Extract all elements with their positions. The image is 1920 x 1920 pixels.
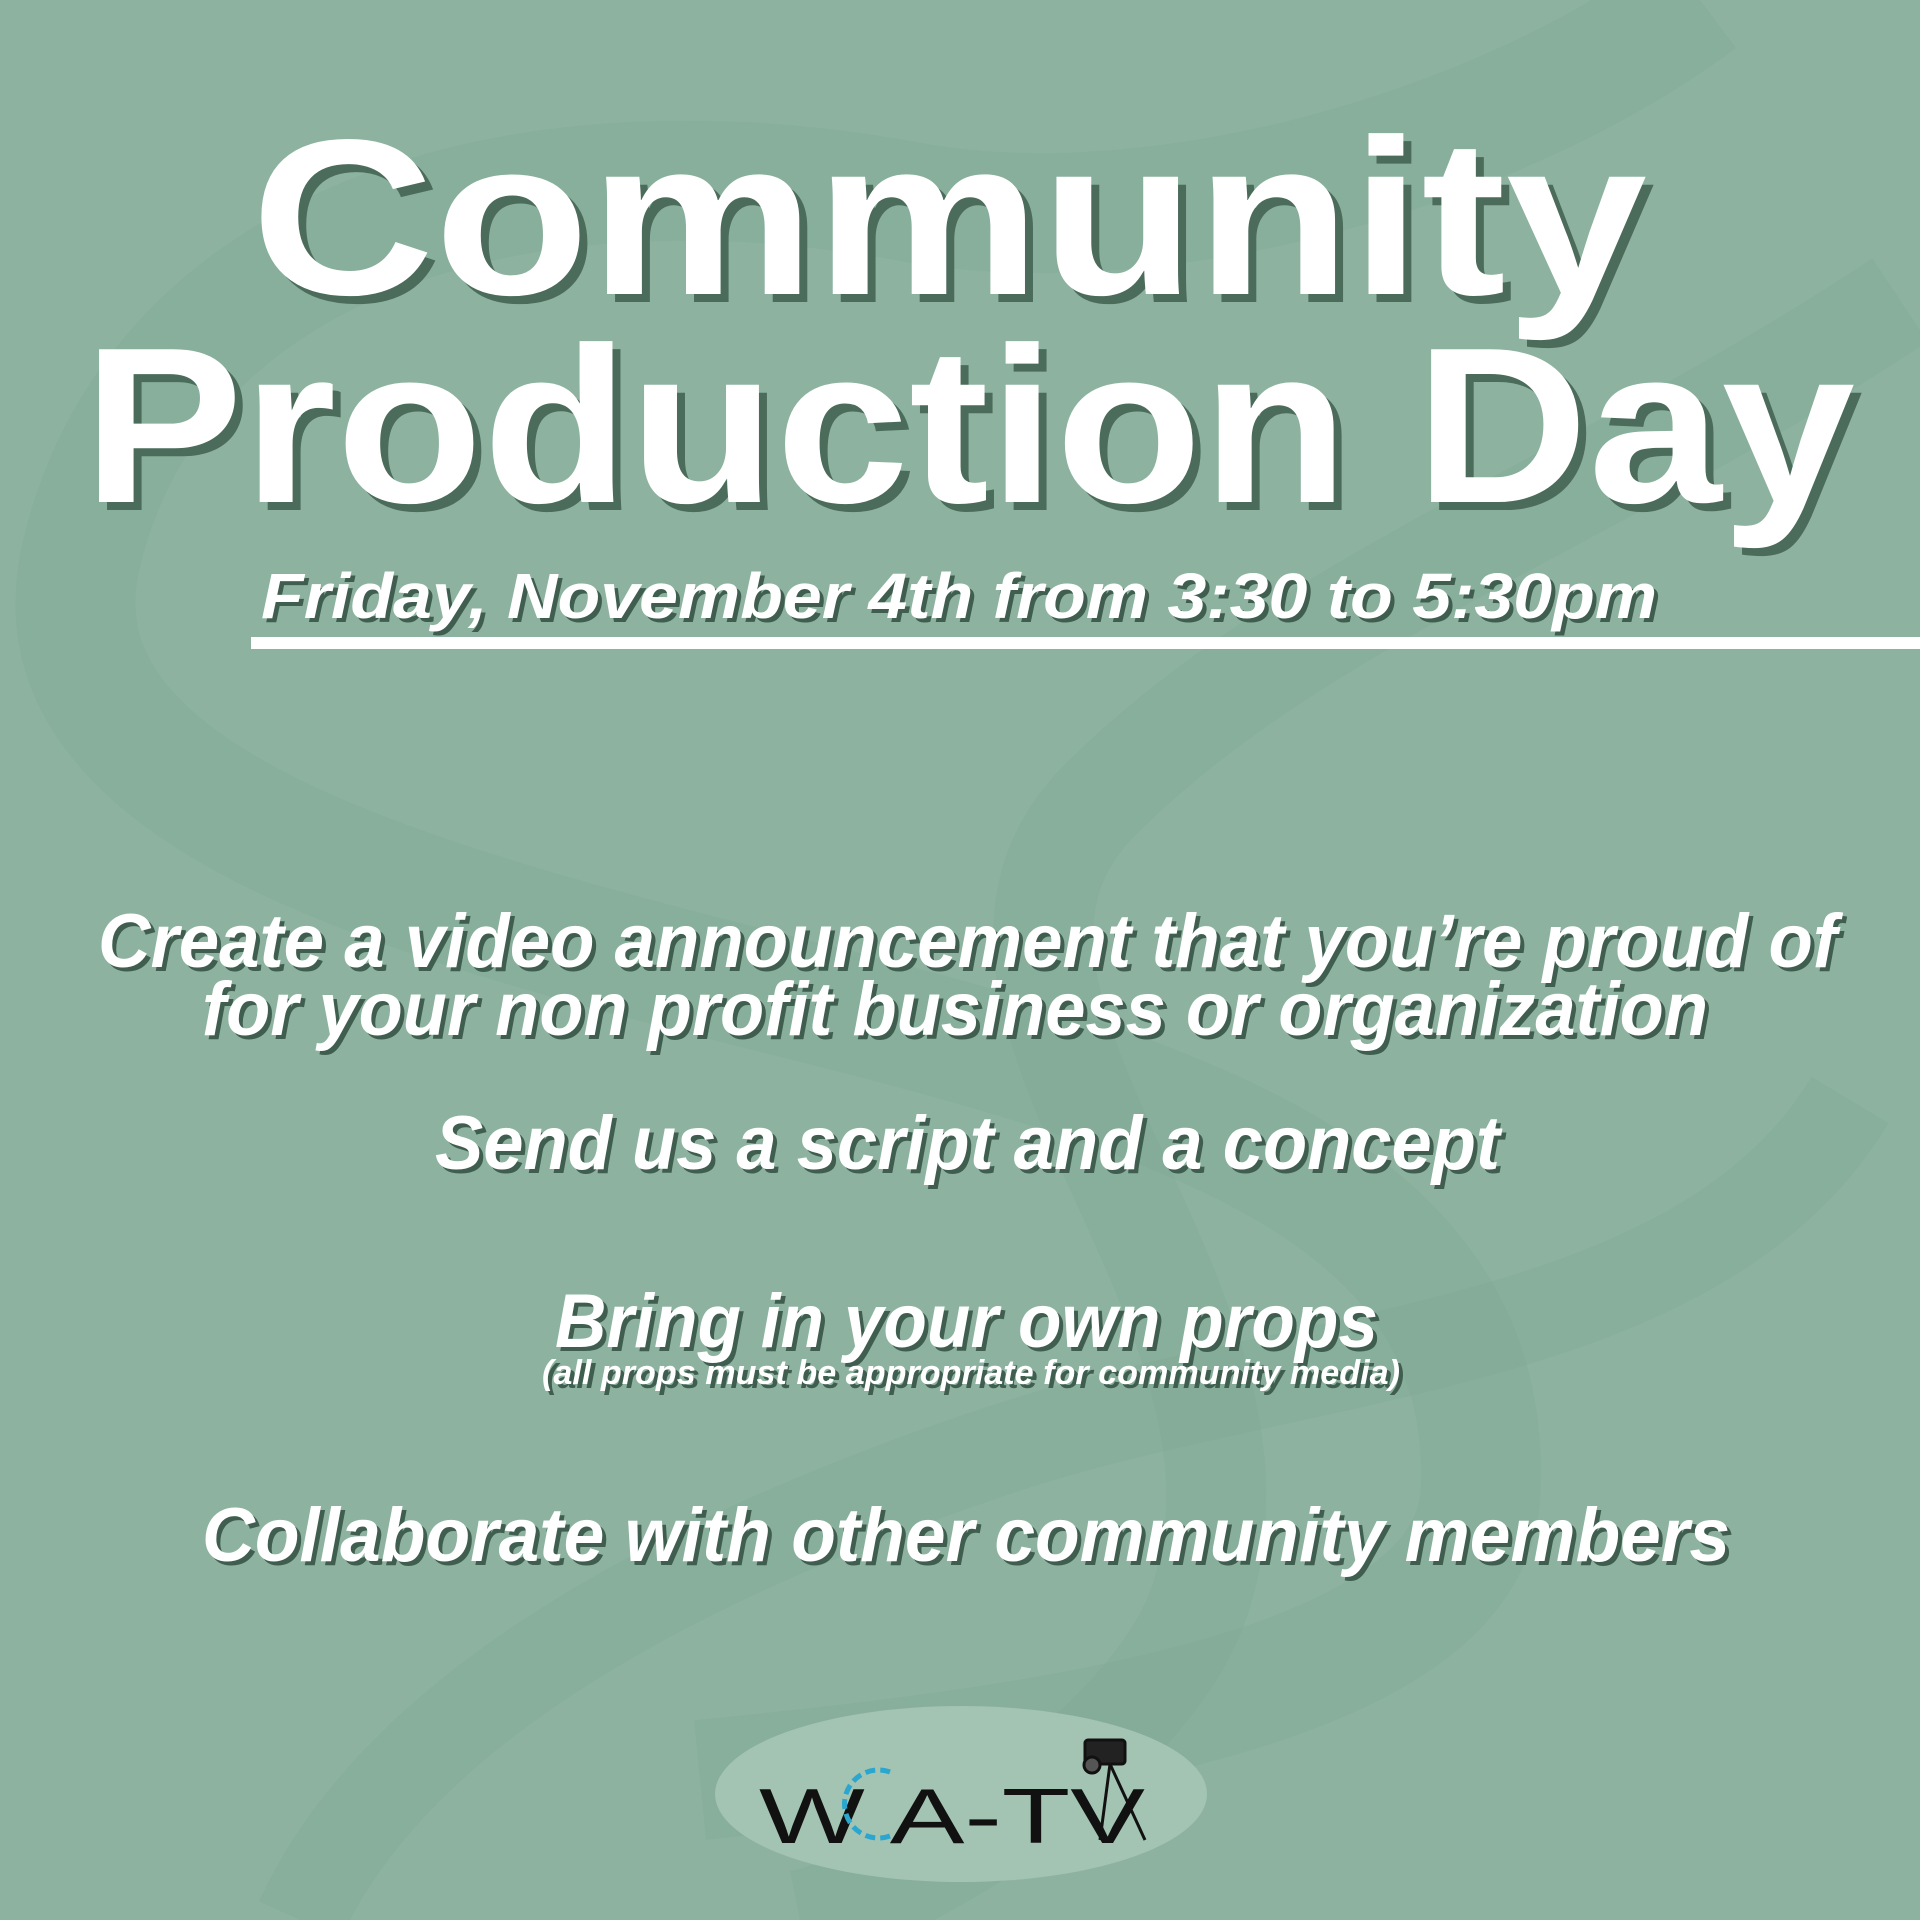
subtitle: date and time: Friday, November 4th from 3:30 to 5:30pm xyxy=(261,560,1657,632)
body text: bullet points: Create a video announcement that you’re proud of xyxy=(102,903,1847,988)
title: Community xyxy=(259,102,1655,350)
body text: bullet points xyxy=(98,899,1847,1582)
underline rule xyxy=(251,637,1920,649)
icon: camera on tripod xyxy=(1084,1740,1145,1840)
body text: bullet points: Send us a script and a concept xyxy=(439,1105,1507,1190)
title xyxy=(83,94,1863,558)
icon: blue C of people xyxy=(845,1770,890,1838)
title: Production Day xyxy=(83,302,1855,550)
body text: bullet points: (all props must be appropriate for community media) xyxy=(546,1358,1404,1396)
subtitle: date and time: Friday, November 4th from 3:30 to 5:30pm xyxy=(265,564,1661,636)
body text: bullet points: (all props must be appropriate for community media) xyxy=(542,1354,1400,1392)
title: Production Day xyxy=(91,310,1863,558)
title: Community xyxy=(251,94,1647,342)
body text: bullet points: Send us a script and a concept xyxy=(435,1101,1503,1186)
body text: bullet points: for your non profit business or organization xyxy=(202,967,1708,1052)
body text: bullet points: for your non profit business or organization xyxy=(206,971,1712,1056)
logo: WCA-TV xyxy=(715,1706,1207,1882)
body text: bullet points: Collaborate with other community members xyxy=(206,1497,1734,1582)
body text: bullet points: Collaborate with other community members xyxy=(202,1493,1730,1578)
body text: bullet points: Bring in your own props xyxy=(555,1279,1378,1364)
body text: bullet points: Create a video announcement that you’re proud of xyxy=(98,899,1843,984)
body text: bullet points: Bring in your own props xyxy=(559,1283,1382,1368)
logo: WCA-TV: W A-TV xyxy=(759,1772,1145,1860)
